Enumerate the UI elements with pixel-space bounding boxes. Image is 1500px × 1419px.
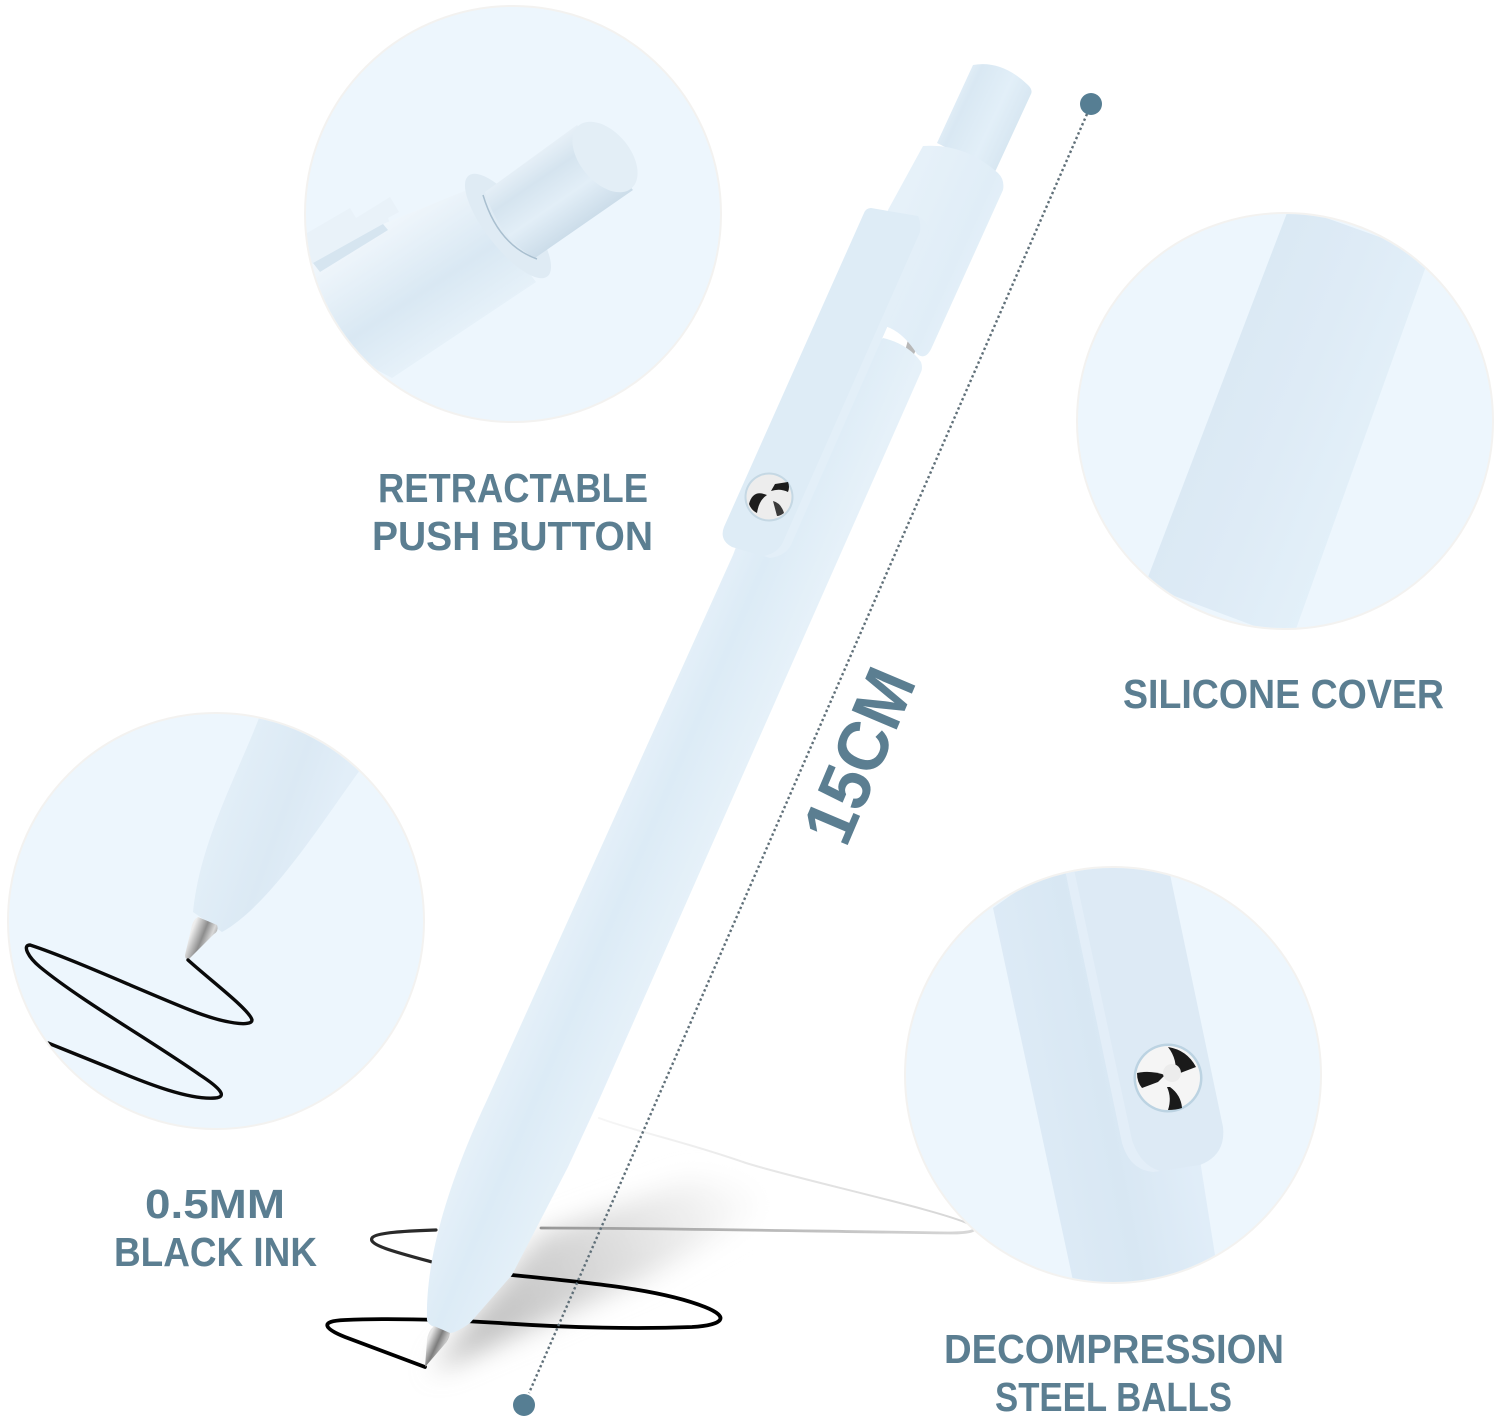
magnified steel ball (1134, 1044, 1202, 1112)
main pen illustration (425, 64, 1032, 1367)
dimension end dot: bottom (513, 1394, 535, 1416)
pen body (427, 338, 922, 1333)
label: 0.5mm black ink: 0.5MM (145, 1181, 285, 1227)
panel: silicone cover detail (1077, 205, 1493, 640)
magnified pen barrel (993, 860, 1225, 1290)
handwriting line (26, 945, 252, 1098)
clip highlight edge (764, 216, 929, 558)
label: 15cm length: 15CM (788, 657, 932, 855)
panel: retractable push button detail (295, 6, 721, 422)
magnified plunger (485, 125, 633, 258)
push button (937, 64, 1032, 172)
label: decompression steel balls: DECOMPRESSION (944, 1326, 1284, 1372)
silver gap under collar (882, 323, 932, 362)
magnified silicone band (1145, 205, 1430, 640)
pen collar (870, 146, 1003, 356)
magnified steel nib (185, 917, 218, 959)
ball reflections (749, 493, 767, 513)
magnified pen tip (193, 700, 360, 932)
label: retractable push button (372, 465, 653, 559)
panel: 0.5mm black ink detail (8, 700, 424, 1129)
steel tip (425, 1326, 450, 1367)
pen clip (723, 208, 929, 558)
label: retractable push button: PUSH BUTTON (372, 513, 653, 559)
label: retractable push button: RETRACTABLE (378, 465, 648, 511)
magnified collar ring (465, 174, 551, 278)
pen ground shadow (432, 1180, 800, 1372)
magnified clip (1074, 868, 1224, 1164)
label: 0.5mm black ink: BLACK INK (114, 1229, 317, 1275)
label: silicone cover: SILICONE COVER (1123, 671, 1444, 717)
ball blades (1168, 1047, 1196, 1075)
label: decompression steel balls: STEEL BALLS (995, 1374, 1232, 1419)
plunger end cap (574, 122, 638, 192)
panel: decompression steel ball detail (905, 860, 1321, 1290)
label: 0.5mm black ink (114, 1181, 317, 1275)
dimension line: 15cm (513, 93, 1102, 1416)
magnified barrel (328, 211, 534, 374)
dimension end dot: top (1080, 93, 1102, 115)
ink scribble under the pen (327, 1118, 975, 1367)
magnified clip fragment (295, 197, 399, 275)
label: decompression steel balls (944, 1326, 1284, 1419)
steel ball on clip (744, 472, 794, 522)
